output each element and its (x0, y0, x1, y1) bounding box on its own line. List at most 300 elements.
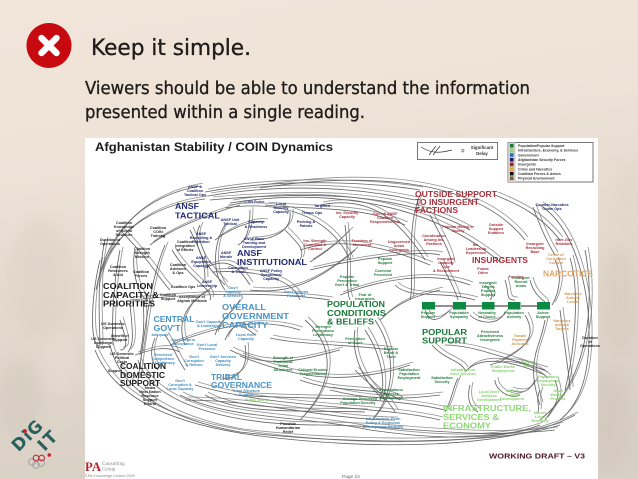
node labels: population: Employment (380, 396, 403, 400)
node labels: population: Population (399, 372, 419, 376)
node labels: ANSF: & Readiness (245, 225, 267, 229)
node labels: ANSF (184, 185, 331, 288)
node labels: infrastructure (245, 360, 566, 423)
heading: Keep it simple. (91, 36, 251, 61)
node labels: government: Capacity (225, 290, 242, 294)
section labels: GOVERNMENT (222, 311, 290, 321)
node labels: ANSF: Capacity (193, 264, 210, 268)
node labels: government: Gov't Services (210, 355, 236, 359)
node labels: insurgents: Insurgent (526, 242, 544, 246)
node labels: coalition: & Ops (172, 271, 184, 275)
node: fuel and humanitarian: Policy & Economic (366, 421, 400, 425)
node labels: insurgents: Other (478, 271, 489, 275)
node labels: coalition: COIN (153, 230, 163, 234)
node labels: population: Support (421, 315, 436, 319)
node labels: population: Attractiveness (477, 334, 503, 338)
section labels: POPULAR (422, 327, 468, 337)
node labels: ANSF: ANSF Policy (260, 269, 283, 273)
node labels: narcotics: Control (549, 261, 563, 265)
node labels: insurgents: Enablers (488, 231, 504, 235)
node labels: insurgents (303, 211, 573, 279)
node labels: coalition: Training (151, 234, 166, 238)
node labels: coalition: Costs (117, 360, 127, 364)
node labels: coalition: US Domestic (91, 337, 115, 341)
node labels: infrastructure: Security (541, 383, 556, 387)
node labels: coalition: Coalition (110, 265, 127, 269)
node: fuel and humanitarian: Crime Ops (542, 207, 562, 211)
node labels: coalition: Afghan Methods (177, 299, 207, 303)
node labels: coalition: Coalition (177, 240, 194, 244)
node labels: coalition: Campaign (94, 341, 113, 345)
node labels: coalition: Media (145, 386, 156, 390)
logo: Dig It (8, 416, 62, 468)
node labels: narcotics: Accounts (511, 342, 529, 346)
node: fuel and humanitarian: Infl. Services, Econ (366, 417, 401, 421)
node labels: government: Presence (199, 347, 215, 351)
node labels: insurgents: Openly (452, 229, 465, 233)
body text: presented within a single reading. (85, 103, 365, 123)
section labels (103, 189, 593, 430)
section labels: TO INSURGENT (415, 197, 480, 207)
node labels: coalition: Strength (134, 251, 150, 255)
section labels: INSURGENTS (472, 255, 528, 265)
node labels: ANSF: Operational (260, 273, 282, 277)
node labels: population: Actively (507, 315, 522, 319)
section labels: SERVICES & (443, 412, 499, 422)
node labels: population: Insurgent (512, 276, 530, 280)
section labels: FACTIONS (415, 205, 458, 215)
node labels: insurgents: Ops (442, 265, 450, 269)
legend: Government (518, 153, 539, 157)
node labels: narcotics: Narcotics (553, 319, 571, 323)
node labels: narcotics (511, 253, 582, 346)
PA consulting logo: Group (102, 466, 116, 472)
node labels: ANSF: Recruiting & (190, 236, 213, 240)
section labels: TRIBAL (211, 372, 243, 382)
node labels: population: Legitimacy (313, 333, 334, 337)
node labels: infrastructure: Gov't (553, 389, 564, 393)
node labels: insurgents: Factions (426, 242, 442, 246)
node labels: population: Population (340, 401, 360, 405)
node labels: insurgents: Insurgent (437, 257, 455, 261)
causal loop connectors (92, 177, 592, 445)
node labels: infrastructure: Local Gov't (479, 390, 500, 394)
node labels: ANSF: Retention (192, 240, 210, 244)
node labels: coalition: Forces (135, 274, 147, 278)
node labels: infrastructure: Services (481, 394, 497, 398)
node labels: ANSF: Capacity (263, 277, 280, 281)
node labels: coalition: Structure (116, 233, 132, 237)
node labels: coalition: Coalition (160, 293, 177, 297)
node labels: population: Security (361, 401, 376, 405)
section labels: CONDITIONS (327, 308, 386, 318)
node labels: population: Services (383, 392, 399, 396)
node labels: infrastructure: Public Works (245, 398, 269, 402)
node labels: insurgents: Responsiveness (370, 220, 400, 224)
legend: Physical Environment (518, 176, 555, 180)
node labels: government: Gov't Capacity (196, 320, 223, 324)
node labels: coalition: of Efforts (177, 248, 193, 252)
node labels: narcotics: Crime of (548, 253, 564, 257)
node labels: infrastructure: Development (477, 398, 502, 402)
node labels: coalition: Acceptance of (179, 295, 206, 299)
node labels: population: Fragmentation (300, 372, 327, 376)
node labels: coalition: Knowledge (114, 225, 134, 229)
section labels: INFRASTRUCTURE, (443, 403, 531, 413)
node labels: government: Competence (152, 357, 174, 361)
node labels: infrastructure: Support (521, 360, 536, 364)
section labels: CAPACITY & (103, 290, 159, 300)
node labels: population: Areas (516, 284, 526, 288)
section labels: OUTSIDE SUPPORT (415, 189, 498, 199)
node labels: infrastructure: Public Works (491, 365, 515, 369)
node labels: infrastructure: Works & (550, 393, 566, 397)
node labels: infrastructure: Market (506, 389, 519, 393)
node labels: insurgents: Command & (304, 243, 326, 247)
node: fuel and humanitarian: Operations (580, 344, 600, 348)
node: fuel and humanitarian: Humanitarian (276, 426, 301, 430)
node labels: coalition: Duration of (100, 238, 121, 242)
node: fuel and humanitarian: Duration (582, 336, 598, 340)
node labels: ANSF: Capacity (273, 210, 290, 214)
node labels: government: Gov't (228, 286, 239, 290)
node labels: coalition: Support (108, 369, 123, 373)
section labels: GOV'T (154, 323, 181, 333)
node labels: insurgents: Coordination (422, 234, 446, 238)
legend (508, 142, 593, 182)
node labels: ANSF: Development (242, 245, 267, 249)
node labels: population: Population (504, 311, 524, 315)
node labels: population: Targets (481, 285, 495, 289)
section labels: CENTRAL (154, 314, 195, 324)
node labels: population: Perceived (359, 397, 378, 401)
body text (85, 79, 530, 123)
node labels: insurgents: Control (308, 247, 322, 251)
node labels: population: Belief & (384, 351, 398, 355)
section labels: GOVERNANCE (211, 380, 272, 390)
logo: Dig It: IT (34, 427, 62, 456)
node labels: population: Popular (384, 347, 399, 351)
node labels: insurgents: Funds (477, 267, 489, 271)
node labels: infrastructure: Gov't Services (450, 372, 476, 376)
node labels: coalition: Support (161, 297, 176, 301)
node labels: coalition: Benefit of (111, 334, 129, 338)
significant delay key (418, 142, 498, 160)
node labels: coalition: Operations (100, 242, 120, 246)
node labels: government: Delivery (216, 363, 231, 367)
node labels: population: Structures (274, 368, 292, 372)
node labels: narcotics: Payment (512, 338, 529, 342)
node: fuel and humanitarian: Counter-Narcotics (535, 203, 569, 207)
legend: Crime and Narcotics (518, 167, 552, 171)
node labels: population: Recruit (514, 280, 528, 284)
node labels: insurgents: Capacity (438, 261, 455, 265)
node: fuel and humanitarian: Possible (280, 422, 296, 426)
node labels: population: Fear of (359, 293, 372, 297)
node labels: government: Corruption & (168, 383, 192, 387)
node labels: insurgents: Outside (489, 223, 503, 227)
node labels: coalition: US Domestic (110, 352, 134, 356)
legend: Population/Popular Support (518, 144, 565, 148)
node labels: insurgents: Popular Hiding in (442, 225, 474, 229)
node labels: government: & Legitimacy (151, 361, 176, 365)
node labels: ANSF: Corruption (228, 266, 248, 270)
node labels: insurgents: Experience (466, 251, 486, 255)
node labels: coalition: Advisors (170, 267, 186, 271)
node labels: ANSF: Security (274, 206, 289, 210)
node labels: government: Corruption (184, 359, 204, 363)
node labels: government: Gov't Local (197, 343, 217, 347)
node labels: government: Gov't Actions (284, 290, 308, 294)
node labels: coalition: US Domestic (101, 322, 125, 326)
section labels: TACTICAL (175, 210, 221, 220)
node labels: coalition: & Aid (113, 273, 124, 277)
PA consulting logo: PA (85, 459, 102, 474)
node labels: population: Popular (378, 257, 393, 261)
node labels: government (151, 286, 308, 397)
node labels: government: Tribal Structure (232, 389, 260, 393)
section labels: ANSF (175, 201, 199, 211)
node labels: population: Neutrality (478, 311, 497, 315)
node labels: insurgents: Capacity (339, 215, 356, 219)
node labels: coalition: Host Nation (139, 390, 161, 394)
section labels: DOMESTIC (120, 370, 166, 380)
section labels: CAPACITY (222, 320, 268, 330)
node labels: ANSF: Capacity (248, 220, 265, 224)
node: fuel and humanitarian: Development Partners (363, 425, 403, 429)
node labels: ANSF: Training and (243, 241, 266, 245)
node labels: insurgents: Freedom of (352, 239, 373, 243)
node labels: insurgents: Base (530, 250, 540, 254)
node labels: insurgents: Movement (353, 243, 372, 247)
node labels: ANSF: Tactical Ops (184, 193, 206, 197)
node labels: ANSF: Leadership (197, 284, 218, 288)
node labels: coalition: Political (115, 356, 129, 360)
green chain boxes (422, 302, 550, 310)
node labels: population: Perception (345, 337, 365, 341)
node labels: ANSF: COIN Force (244, 200, 264, 204)
legend: Insurgents (518, 163, 536, 167)
node labels: insurgents: Coalition (377, 216, 394, 220)
section labels: OVERALL (222, 302, 267, 312)
node labels: narcotics: Tamale (514, 334, 526, 338)
node labels: coalition: Coalition (134, 247, 151, 251)
node labels: population: Sympathy (450, 315, 469, 319)
node labels: ANSF: Coalition (187, 189, 204, 193)
panel: causal loop diagram image (85, 138, 600, 479)
node labels: government: Gov't Reform (171, 338, 196, 342)
section labels: POPULATION (327, 299, 385, 309)
PA consulting logo: Consulting (102, 461, 125, 467)
node labels: infrastructure: Projects (551, 397, 565, 401)
node labels: population: Population (449, 311, 469, 315)
node labels: population: Support (536, 315, 551, 319)
node labels: ANSF: Policing & (297, 220, 316, 224)
node labels: infrastructure: Economy (531, 419, 549, 423)
node: fuel and humanitarian: of (588, 340, 593, 344)
node labels: population: Satisfaction (431, 376, 453, 380)
node labels: ANSF: Patrols (300, 224, 312, 228)
section labels: PRIORITIES (103, 298, 155, 308)
node labels: insurgents: Support (489, 227, 504, 231)
node labels: ANSF: ANSF & (188, 185, 202, 189)
node labels: narcotics: Narcotics (564, 292, 582, 296)
node labels: insurgents: Insurgents (389, 248, 409, 252)
node labels: insurgents: Ungoverned (388, 240, 411, 244)
node labels: coalition: Support (113, 338, 128, 342)
node labels: population: Perception (337, 279, 357, 283)
section labels: COALITION (120, 361, 166, 371)
node labels: infrastructure: Dev. (524, 364, 532, 368)
node labels: infrastructure: Local (535, 415, 545, 419)
node labels: narcotics: Targets (555, 327, 569, 331)
section labels: INSTITUTIONAL (237, 257, 308, 267)
node labels: coalition: of Social (116, 229, 132, 233)
node labels: ANSF: ANSF (221, 251, 232, 255)
node labels: population: Traditional (273, 360, 293, 364)
significant delay key: Delay (476, 151, 488, 156)
node labels: insurgents: Ins. (473, 243, 479, 247)
node labels: population: Cultural Erosion (298, 368, 328, 372)
section labels: SUPPORT (120, 378, 161, 388)
node labels: narcotics: Levels (567, 300, 579, 304)
node labels: population: Support (378, 261, 393, 265)
node labels: coalition: Operations (103, 326, 123, 330)
node labels: population: Insurgents (480, 338, 500, 342)
node labels: ANSF: ANSF (202, 280, 213, 284)
node labels: narcotics: Activity (566, 296, 581, 300)
node labels: government: Perceived (287, 294, 306, 298)
node labels: population: Coercion (375, 269, 392, 273)
node labels: insurgents: Recruiting (526, 246, 545, 250)
node labels: population: Employment (398, 376, 421, 380)
node labels: ANSF: ANSF Base (244, 237, 264, 241)
icon: red cross mark (26, 23, 72, 68)
node labels: coalition: Coalition (150, 226, 167, 230)
node: fuel and humanitarian: Relief (283, 430, 294, 434)
node labels: coalition: Support (96, 345, 111, 349)
node labels: coalition: Mission (135, 255, 150, 259)
PA consulting logo (85, 459, 135, 478)
node labels: government: & Reform (185, 363, 203, 367)
node labels: population: Active (537, 311, 549, 315)
section labels: ANSF (237, 248, 262, 258)
node labels: infrastructure: Infrastructure (451, 368, 475, 372)
node labels: ANSF: Tactical (223, 222, 237, 226)
node labels: ANSF: Tempo Ops (302, 211, 322, 215)
section labels: NARCOTICS (543, 268, 593, 278)
working draft stamp: WORKING DRAFT – V3 (489, 452, 585, 460)
node labels: insurgents: Inter-Gov (556, 238, 573, 242)
node labels: population: Expectations (379, 388, 403, 392)
node labels: population: Perceived (374, 273, 393, 277)
section labels: COALITION (103, 281, 153, 291)
node labels: population: Perceptions (312, 329, 334, 333)
significant delay key: = (461, 149, 465, 155)
node labels: insurgents: & Recruitment (433, 269, 460, 273)
node labels: population: Strength of (273, 356, 294, 360)
node labels: population: Popular (481, 289, 496, 293)
node labels: coalition: Efforts (144, 402, 156, 406)
node labels: ANSF: Equipment (191, 260, 212, 264)
node labels: government: Capacity (215, 359, 232, 363)
node labels: population: of Gov't (348, 341, 363, 345)
node labels: government: & Leadership (197, 324, 222, 328)
node labels: insurgents: Among Ins. (424, 238, 444, 242)
node labels: population: Satisfaction (398, 368, 420, 372)
node labels: population: Security (435, 380, 450, 384)
node labels: population: Gov't & Tribal (335, 283, 359, 287)
node labels: infrastructure: Market (534, 411, 547, 415)
node labels: government: Perceived (154, 353, 173, 357)
node labels: coalition: Support (143, 398, 158, 402)
node labels: government: Gov't (175, 379, 186, 383)
node labels: government: Local Gov't (236, 333, 257, 337)
node labels: coalition (91, 221, 207, 406)
node labels: government: Support (239, 393, 254, 397)
node labels: insurgents: Funding (509, 275, 524, 279)
node labels: insurgents: Ins. Security (336, 211, 359, 215)
logo: Dig It: DiG (8, 416, 47, 456)
legend: Afghanistan Security Forces (518, 158, 566, 162)
node labels: infrastructure: Support (505, 393, 520, 397)
node labels: government: Gov't (189, 355, 200, 359)
node labels: population: Average (343, 397, 357, 401)
node labels: coalition: Resources (108, 269, 128, 273)
node labels: population: Strength (315, 325, 331, 329)
node labels: coalition: Coalition (170, 263, 187, 267)
node labels: infrastructure: Employment (537, 379, 560, 383)
node labels: population: Insurgent (479, 281, 497, 285)
node labels: infrastructure: Employment (492, 369, 515, 373)
node labels: population: Support (481, 293, 496, 297)
node labels: government: & Services (223, 294, 243, 298)
node labels: ANSF: Local (276, 202, 286, 206)
section labels: & BELIEFS (327, 316, 374, 326)
node labels: population: Popular (421, 311, 436, 315)
node labels: ANSF: ANSF (196, 256, 207, 260)
node labels: population: Perceived (481, 330, 500, 334)
node labels: ANSF: Morale (220, 255, 232, 259)
node labels: ANSF: & Trust (231, 270, 245, 274)
diagram title: Afghanistan Stability / COIN Dynamics (95, 140, 333, 154)
node labels: ANSF: ANSF (196, 232, 207, 236)
node labels: population: Popular (340, 275, 355, 279)
legend: Infrastructure, Economy, & Services (518, 149, 578, 153)
legend: Coalition Forces & Actors (518, 172, 561, 176)
node labels: ANSF: Targeted (314, 204, 331, 208)
node labels: government: Adequate (151, 333, 169, 337)
node labels: government: Capacity (238, 337, 255, 341)
body text: Viewers should be able to understand the information (85, 79, 530, 99)
section labels: SUPPORT (422, 336, 468, 346)
node labels: government: Acceptance (172, 342, 194, 346)
node labels: population: Insurgents (355, 297, 375, 301)
significant delay key: Significant (471, 145, 494, 150)
node labels: population: of Choice (478, 315, 496, 319)
node labels: population: Trust (386, 355, 396, 359)
node labels: population: Tribal (278, 364, 288, 368)
node labels: government: Local Capacity (167, 387, 194, 391)
node labels: insurgents: Gov't & ANSF (373, 212, 398, 216)
node labels: coalition: Coalition Ops (171, 285, 195, 289)
node labels: insurgents: Ins. Strength (303, 239, 327, 243)
node labels: insurgents: Leadership (466, 247, 487, 251)
node labels: coalition: Coalition (133, 270, 150, 274)
PA consulting logo: ©PA Knowledge Limited 2009 (85, 474, 135, 478)
node labels: coalition: Integration (175, 244, 195, 248)
node labels: population (273, 257, 551, 405)
